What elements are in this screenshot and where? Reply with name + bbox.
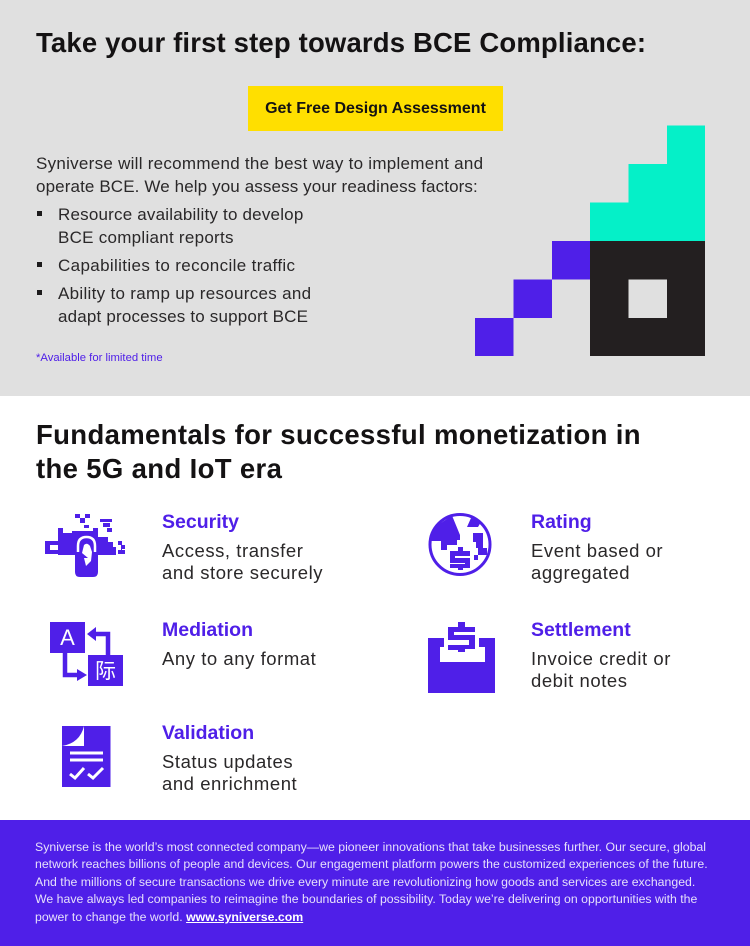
bullet: reconcile traffic: Capabilities to reconcile traffic xyxy=(58,256,295,275)
graphic: pixel staircase xyxy=(475,126,705,356)
bullet list: readiness factors xyxy=(37,205,311,326)
bullet: resource availability: Resource availability to develop xyxy=(58,205,303,224)
intro text xyxy=(36,154,483,196)
description: rating: aggregated xyxy=(531,562,630,583)
icon: rating xyxy=(428,513,492,576)
title: settlement: Settlement xyxy=(531,619,631,641)
footnote: *Available for limited time xyxy=(36,352,163,364)
description: validation: and enrichment xyxy=(162,773,297,794)
heading: fundamentals: the 5G and IoT era xyxy=(36,453,282,484)
description: validation: Status updates xyxy=(162,751,293,772)
icon: security xyxy=(45,514,125,577)
bullet: ramp up resources: Ability to ramp up resources and xyxy=(58,284,311,303)
description: security xyxy=(162,540,323,583)
icon: settlement xyxy=(428,622,495,693)
description: mediation: Any to any format xyxy=(162,648,316,669)
icon: mediation: 际 xyxy=(95,655,116,685)
button: free design assessment: Get Free Design Assessment xyxy=(265,100,486,117)
title: validation: Validation xyxy=(162,722,254,744)
description: settlement xyxy=(531,648,671,691)
bullet: resource availability: BCE compliant reports xyxy=(58,228,234,247)
title: rating: Rating xyxy=(531,511,592,533)
panel: call to action xyxy=(0,0,750,396)
intro text: Syniverse will recommend the best way to implement and xyxy=(36,154,483,173)
button: free design assessment xyxy=(248,86,503,131)
heading: fundamentals xyxy=(36,419,641,484)
description: rating xyxy=(531,540,663,583)
bullet: resource availability xyxy=(37,205,303,247)
feature: rating xyxy=(531,511,663,583)
about text: power to change the world. www.syniverse.com xyxy=(35,910,303,924)
icon: validation xyxy=(62,726,110,787)
description: security: and store securely xyxy=(162,562,323,583)
feature: settlement xyxy=(531,619,671,691)
bullet: ramp up resources xyxy=(37,284,311,326)
description: validation xyxy=(162,751,297,794)
description: settlement: debit notes xyxy=(531,670,628,691)
title: security: Security xyxy=(162,511,239,533)
feature: mediation xyxy=(162,619,316,669)
description: rating: Event based or xyxy=(531,540,663,561)
about text: We have always led companies to reimagine the boundaries of possibility. Today we’re delivering on opportunities with the xyxy=(35,892,697,906)
intro text: operate BCE. We help you assess your readiness factors: xyxy=(36,177,478,196)
feature: security xyxy=(162,511,323,583)
title: mediation: Mediation xyxy=(162,619,253,641)
panel: about syniverse xyxy=(0,820,750,946)
about text: And the millions of secure transactions we drive every minute are revolutionizing how goods and services are exchanged. xyxy=(35,875,695,889)
icon: mediation xyxy=(50,622,123,686)
heading: fundamentals: Fundamentals for successful monetization in xyxy=(36,419,641,450)
about text: Syniverse is the world’s most connected company—we pioneer innovations that take businesses further. Our secure, global xyxy=(35,840,706,854)
feature: validation xyxy=(162,722,297,794)
description: settlement: Invoice credit or xyxy=(531,648,671,669)
icon: mediation: A xyxy=(60,625,75,650)
description: security: Access, transfer xyxy=(162,540,303,561)
bullet: ramp up resources: adapt processes to support BCE xyxy=(58,307,308,326)
about text xyxy=(35,840,708,924)
heading: first step: Take your first step towards BCE Compliance: xyxy=(36,27,646,58)
about text: network reaches billions of people and devices. Our engagement platform powers the customized experiences of the future. xyxy=(35,857,708,871)
